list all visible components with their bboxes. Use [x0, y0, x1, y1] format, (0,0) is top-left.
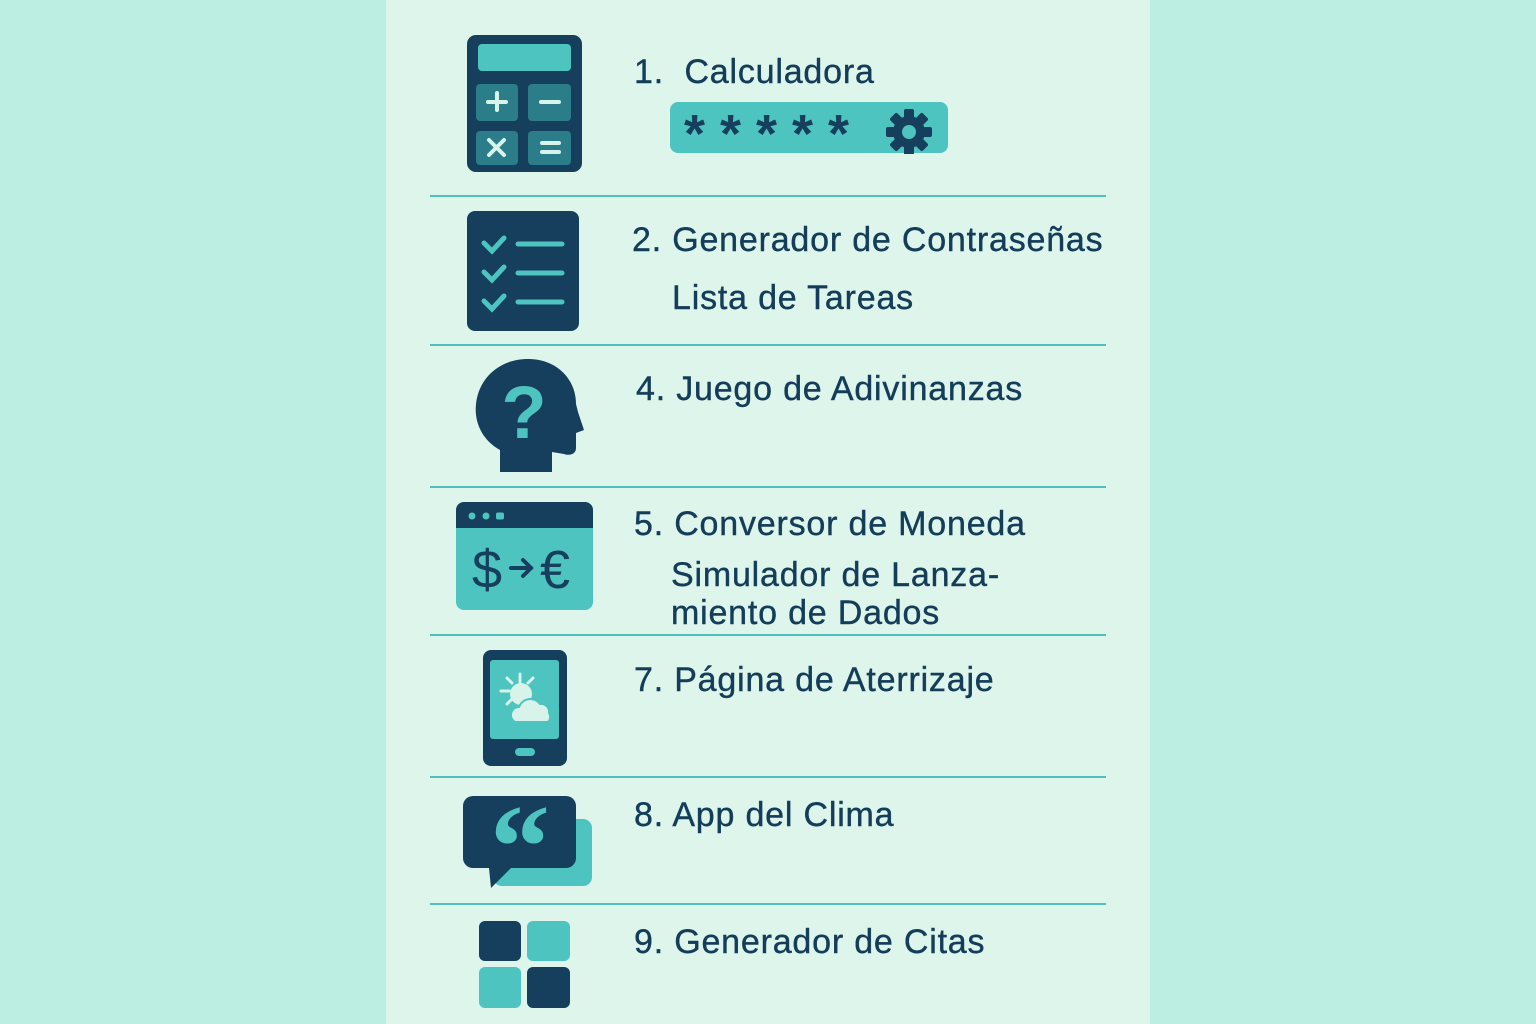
icon: currency converter: $ [472, 540, 502, 600]
text: item 4: 4. Juego de Adivinanzas [636, 370, 1023, 408]
text: item 1: 1. Calculadora [634, 53, 875, 91]
text: item 7: 7. Página de Aterrizaje [634, 661, 995, 699]
icon: head with question mark: ? [501, 371, 547, 454]
text: simulador: Simulador de Lanza- [671, 556, 1000, 594]
icon: speech bubble quotes [463, 795, 592, 891]
icon: grid [479, 921, 570, 1008]
text: simulador: miento de Dados [671, 594, 940, 632]
icon: tablet weather [483, 650, 567, 766]
icon: checklist [467, 211, 579, 331]
password field [670, 102, 948, 154]
text: item 5: 5. Conversor de Moneda [634, 505, 1026, 543]
text: item 2: 2. Generador de Contraseñas [632, 221, 1103, 259]
text: simulador [671, 556, 1000, 632]
icon: currency converter [456, 502, 593, 610]
icon: head with question mark [476, 359, 584, 472]
text: lista de tareas: Lista de Tareas [672, 279, 914, 317]
text: item 9: 9. Generador de Citas [634, 923, 985, 961]
icon: calculator [467, 35, 582, 172]
panel: center [386, 0, 1150, 1024]
text: item 8: 8. App del Clima [634, 796, 894, 834]
icon: currency converter: € [540, 540, 570, 600]
